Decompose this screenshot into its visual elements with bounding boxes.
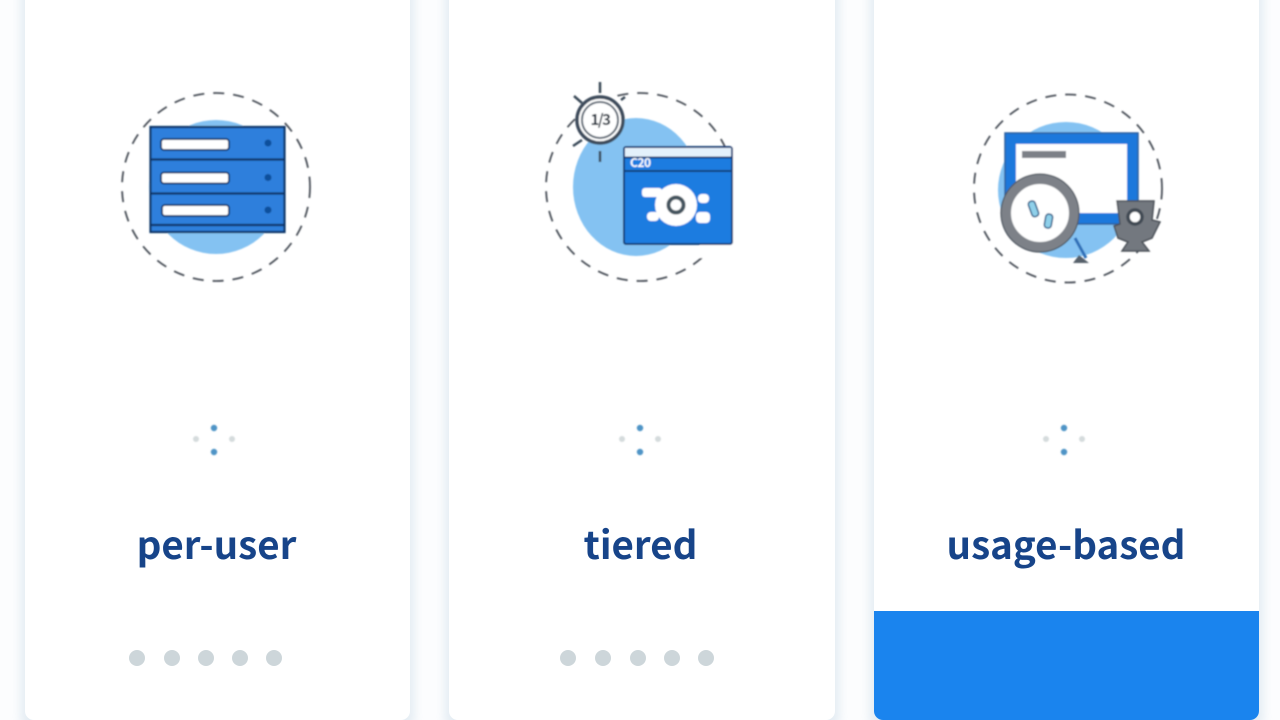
small dots: per-user [193, 425, 235, 455]
small dots: tiered [619, 425, 661, 455]
icon: price window with gear and clock [546, 82, 745, 281]
small dots: usage-based [1043, 425, 1085, 455]
icon: server rack [122, 93, 310, 281]
icon: price window with gear and clock: C20 [630, 154, 651, 171]
panel: per-user [20, 0, 415, 720]
panel: tiered [444, 0, 840, 720]
blue footer band [874, 611, 1259, 720]
heading: tiered: tiered [584, 515, 697, 571]
panel: usage-based [869, 0, 1264, 720]
pagination dots: tiered [560, 650, 714, 666]
heading: usage-based: usage-based [947, 515, 1185, 571]
pagination dots: per-user [129, 650, 282, 666]
heading: per-user: per-user [137, 515, 297, 571]
icon: price window with gear and clock: 1/3 [590, 109, 610, 130]
icon: monitor with magnifier and meter [974, 94, 1162, 282]
